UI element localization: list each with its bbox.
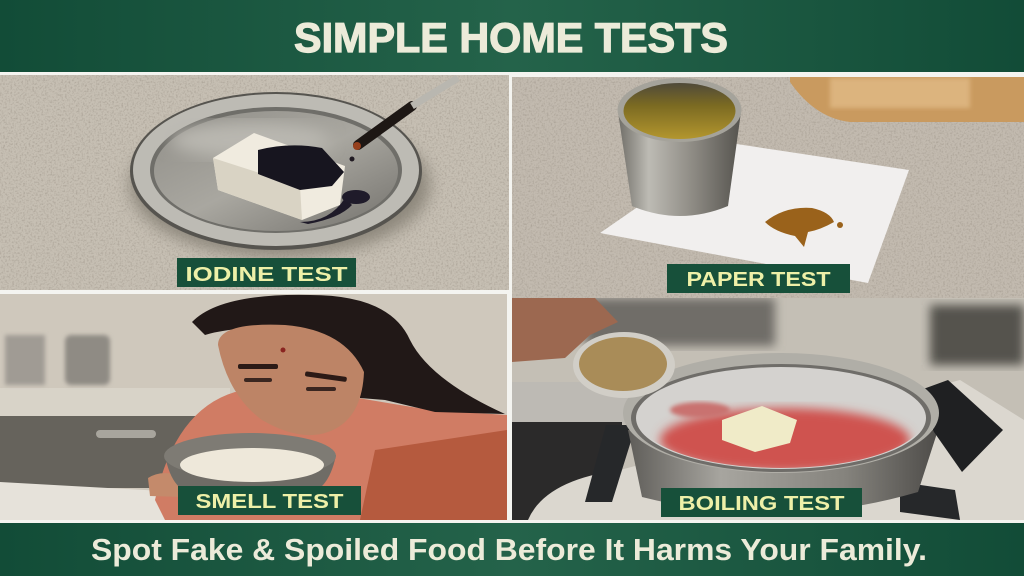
title: SIMPLE HOME TESTS [294, 14, 728, 61]
panel: paper test [512, 77, 1024, 298]
icon: steel plate [130, 92, 422, 250]
icon: steel cup of oil [618, 78, 742, 216]
icon: paneer block with iodine [213, 133, 370, 224]
icon: butter block [722, 406, 797, 452]
icon: hand with spoon of spice [512, 298, 675, 398]
wooden board [790, 77, 1024, 122]
icon: dropper [350, 78, 458, 162]
oil stain [765, 208, 843, 247]
label: smell test: SMELL TEST [196, 491, 344, 513]
label: paper test [667, 264, 850, 293]
woman sniffing bowl [148, 295, 507, 520]
icon: pot of boiling water [623, 353, 1003, 513]
label: paper test: PAPER TEST [686, 269, 830, 291]
label: smell test [178, 486, 361, 515]
header banner [0, 0, 1024, 72]
icon: stove [585, 425, 960, 520]
icon: paper sheet [600, 143, 909, 283]
footer banner [0, 523, 1024, 576]
label: iodine test [177, 258, 356, 287]
tagline: Spot Fake & Spoiled Food Before It Harms Your Family. [91, 532, 927, 567]
label: boiling test [661, 488, 862, 517]
icon: bowl [164, 433, 336, 486]
panel: iodine test [0, 75, 509, 290]
label: iodine test: IODINE TEST [186, 264, 348, 286]
panel: smell test [0, 294, 507, 520]
label: boiling test: BOILING TEST [678, 493, 844, 515]
panel: boiling test [512, 298, 1024, 520]
